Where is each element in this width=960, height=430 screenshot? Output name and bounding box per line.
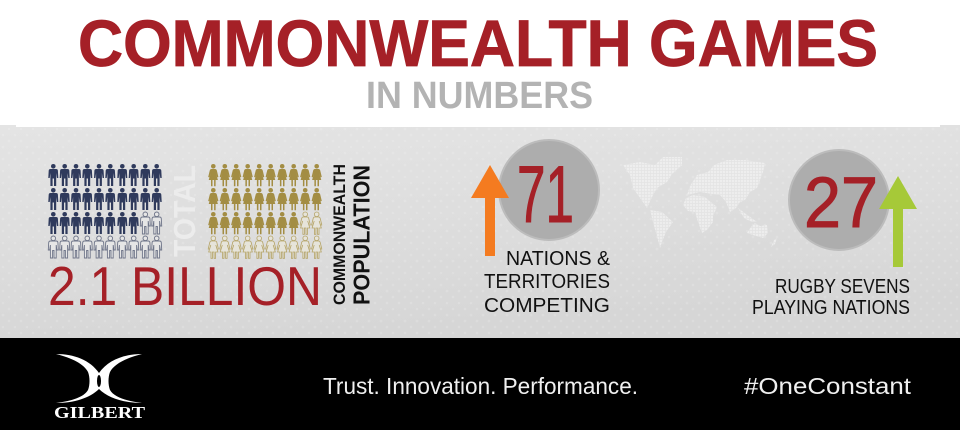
caption: nations and territories competing — [484, 248, 611, 317]
panel: textured grey background — [0, 125, 960, 338]
world map (dotted) — [623, 157, 777, 248]
circle behind 71 — [499, 140, 599, 240]
big number: 2.1 billion: 2.1 BILLION — [48, 255, 322, 317]
caption: nations and territories competing: NATIONS & — [506, 248, 611, 270]
caption: nations and territories competing: TERRITORIES — [484, 271, 610, 293]
arrow: green up — [879, 176, 917, 267]
label: TOTAL (vertical): TOTAL — [167, 165, 202, 257]
logo wordmark: GILBERT — [54, 403, 146, 422]
pictogram: male population (navy figures) — [48, 164, 162, 258]
number 71: 71 — [517, 150, 574, 240]
hashtag: #OneConstant — [744, 373, 912, 399]
stat: 27 rugby sevens nations — [752, 150, 917, 319]
tagline: Trust. Innovation. Performance. — [323, 373, 638, 399]
arrow: orange up — [471, 165, 509, 256]
subtitle: IN NUMBERS — [366, 75, 593, 117]
stat: 71 nations and territories — [471, 140, 611, 317]
number 27: 27 — [804, 164, 878, 243]
footer bar — [0, 338, 960, 430]
pictogram: female population (gold figures) — [208, 164, 322, 258]
caption: rugby sevens playing nations — [752, 276, 910, 319]
label: commonwealth population (vertical): POPULATION — [348, 165, 374, 305]
title: COMMONWEALTH GAMES — [78, 6, 878, 80]
caption: rugby sevens playing nations: RUGBY SEVENS — [775, 276, 910, 298]
label: commonwealth population (vertical): COMMONWEALTH — [330, 164, 349, 305]
circle behind 27 — [789, 150, 889, 250]
logo: Gilbert — [54, 354, 146, 422]
label: commonwealth population (vertical) — [330, 164, 374, 305]
caption: rugby sevens playing nations: PLAYING NATIONS — [752, 297, 910, 319]
logo mark — [56, 354, 142, 403]
caption: nations and territories competing: COMPETING — [484, 295, 610, 317]
